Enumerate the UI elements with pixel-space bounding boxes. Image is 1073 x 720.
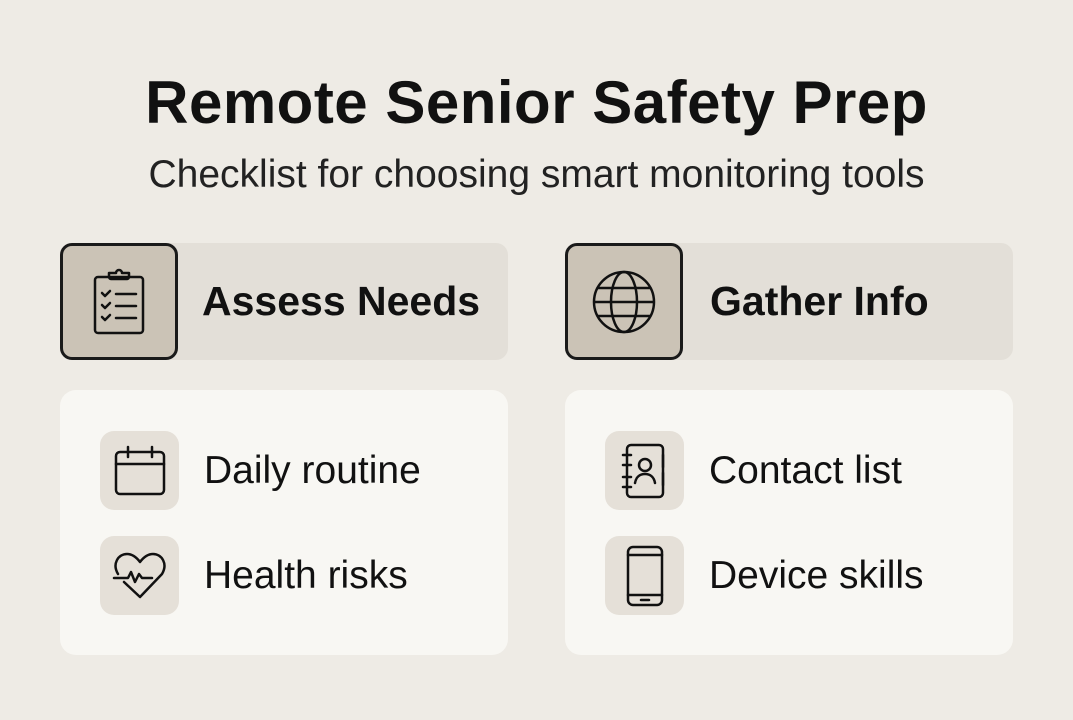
icon: calendar (100, 431, 179, 510)
item: daily routine (100, 431, 421, 510)
icon: phone (605, 536, 684, 615)
icon: clipboard (60, 243, 178, 360)
item: device skills (605, 536, 924, 615)
icon: contact book (605, 431, 684, 510)
item: health risks (100, 536, 408, 615)
label: Device skills (709, 554, 924, 597)
panel: gather info items (565, 390, 1013, 655)
icon: heart pulse (100, 536, 179, 615)
title: Remote Senior Safety Prep (145, 69, 928, 136)
heading: assess needs: Assess Needs (202, 278, 480, 324)
label: Contact list (709, 449, 902, 492)
subtitle: Checklist for choosing smart monitoring tools (148, 153, 924, 196)
label: Health risks (204, 554, 408, 597)
icon: globe (565, 243, 683, 360)
label: Daily routine (204, 449, 421, 492)
heading: gather info: Gather Info (710, 278, 929, 324)
item: contact list (605, 431, 902, 510)
panel: assess needs items (60, 390, 508, 655)
panel header: assess needs (60, 243, 508, 360)
panel header: gather info (565, 243, 1013, 360)
